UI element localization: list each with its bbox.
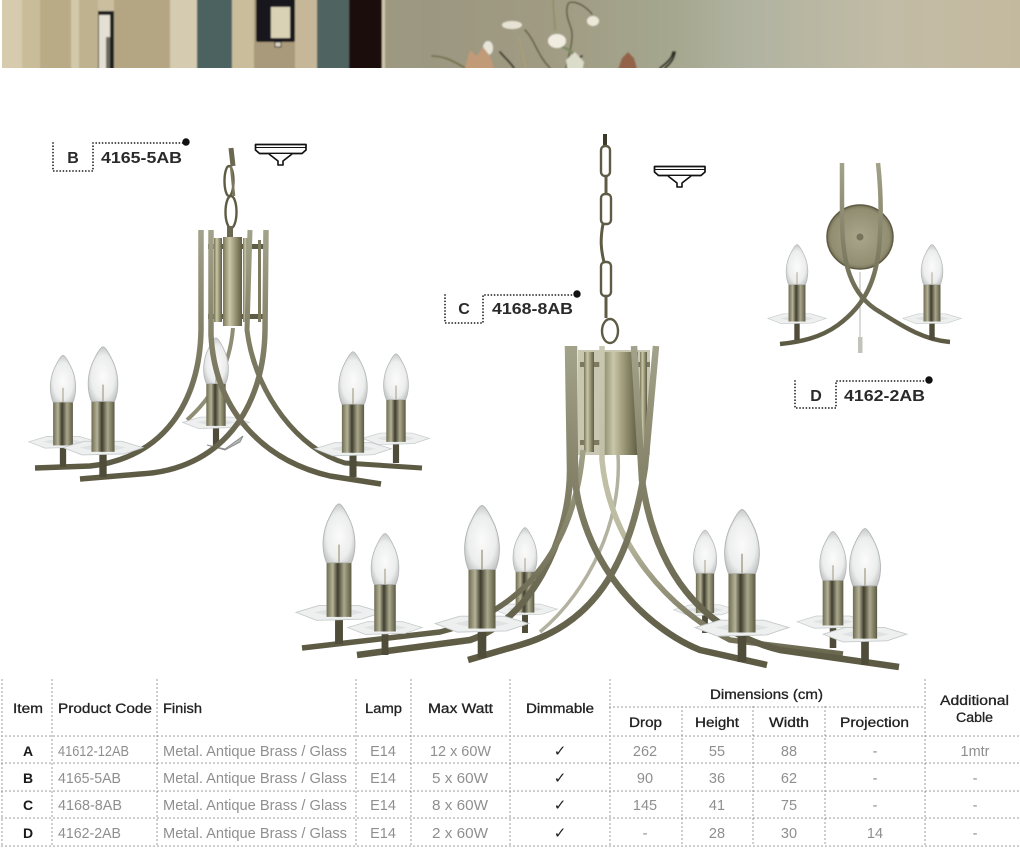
banner photo: interior wall with flowers [0, 0, 1020, 72]
row C: Metal. Antique Brass / Glass [163, 798, 347, 814]
row A [23, 742, 990, 760]
label C: 4168-8AB [445, 290, 581, 323]
label D: 4162-2AB [795, 376, 933, 408]
row C: - [973, 798, 978, 814]
row B: 90 [637, 771, 653, 787]
wall light D: two-light [768, 163, 961, 353]
row D: E14 [370, 826, 396, 842]
row A: Metal. Antique Brass / Glass [163, 744, 347, 760]
pull cord [858, 272, 862, 353]
label B: 4165-5AB [53, 138, 190, 171]
row B: - [973, 771, 978, 787]
table header: Item [13, 701, 43, 716]
wall sconce [256, 0, 295, 47]
table header: Dimensions (cm) [710, 687, 823, 702]
wall plate [827, 205, 893, 269]
chandelier C: eight-light [296, 134, 907, 667]
label C: 4168-8AB: C [458, 301, 470, 318]
table header: Lamp [365, 701, 402, 716]
row C: 75 [781, 798, 797, 814]
row C [23, 796, 978, 814]
row D: - [973, 826, 978, 842]
arms C [302, 346, 899, 667]
table header: Width [769, 715, 809, 730]
back candle [183, 338, 249, 447]
row B: Metal. Antique Brass / Glass [163, 771, 347, 787]
row A: E14 [370, 744, 396, 760]
label B: 4165-5AB: 4165-5AB [101, 150, 182, 167]
table header: Max Watt [428, 701, 493, 716]
row A: 12 x 60W [430, 744, 491, 760]
row D: 30 [781, 826, 797, 842]
table header: Product Code [58, 701, 152, 716]
label C: 4168-8AB: 4168-8AB [492, 301, 573, 318]
row D: D [23, 825, 33, 841]
table header: Drop [629, 715, 662, 730]
ceiling body C [578, 350, 650, 455]
chain B [224, 148, 236, 238]
row B: ✓ [554, 769, 566, 787]
row D: ✓ [554, 824, 566, 842]
table header [13, 687, 1009, 730]
table header: Projection [840, 715, 909, 730]
row B: - [873, 771, 878, 787]
row B [23, 769, 978, 787]
table header: Additional [940, 693, 1009, 708]
label D: 4162-2AB: 4162-2AB [844, 388, 925, 405]
row A: 88 [781, 744, 797, 760]
ceiling body B [208, 237, 264, 326]
row C: E14 [370, 798, 396, 814]
row B: E14 [370, 771, 396, 787]
candles C [296, 504, 907, 665]
chandelier B: five-light [29, 148, 429, 484]
table grid [2, 680, 1020, 846]
table header: Finish [163, 701, 202, 716]
row A: 1mtr [960, 744, 990, 760]
row D: 2 x 60W [432, 826, 488, 842]
row A: 55 [709, 744, 725, 760]
candles B [29, 347, 429, 477]
row C: 145 [633, 798, 657, 814]
row D [23, 824, 978, 842]
back arm with chrome end [187, 328, 243, 450]
row A: 41612-12AB [58, 744, 129, 760]
arms B [35, 230, 422, 484]
row C: C [23, 797, 33, 813]
row B: B [23, 770, 33, 786]
candles D [768, 245, 961, 340]
picture frame [98, 11, 114, 71]
row C: ✓ [554, 796, 566, 814]
label B: 4165-5AB: B [67, 150, 79, 167]
row D: 4162-2AB [58, 826, 121, 842]
row C: 41 [709, 798, 725, 814]
row B: 4165-5AB [58, 771, 121, 787]
icon: ceiling rose B [256, 144, 306, 165]
row A: A [23, 743, 33, 759]
table header: Dimmable [526, 701, 594, 716]
row B: 5 x 60W [432, 771, 488, 787]
row C: 8 x 60W [432, 798, 488, 814]
specification table [2, 680, 1020, 846]
row D: Metal. Antique Brass / Glass [163, 826, 347, 842]
icon: ceiling rose C [654, 166, 705, 187]
row A: - [873, 744, 878, 760]
row B: 36 [709, 771, 725, 787]
row D: 14 [867, 826, 883, 842]
row B: 62 [781, 771, 797, 787]
flower arrangement [432, 0, 675, 72]
table header: Height [695, 715, 739, 730]
chain C [601, 134, 618, 343]
table header: Cable [956, 710, 993, 725]
back candles C [493, 528, 737, 633]
row D: 28 [709, 826, 725, 842]
row D: - [643, 826, 648, 842]
row C: 4168-8AB [58, 798, 122, 814]
arms D [780, 163, 950, 344]
row A: ✓ [554, 742, 566, 760]
row C: - [873, 798, 878, 814]
label D: 4162-2AB: D [810, 388, 822, 405]
row A: 262 [633, 744, 657, 760]
